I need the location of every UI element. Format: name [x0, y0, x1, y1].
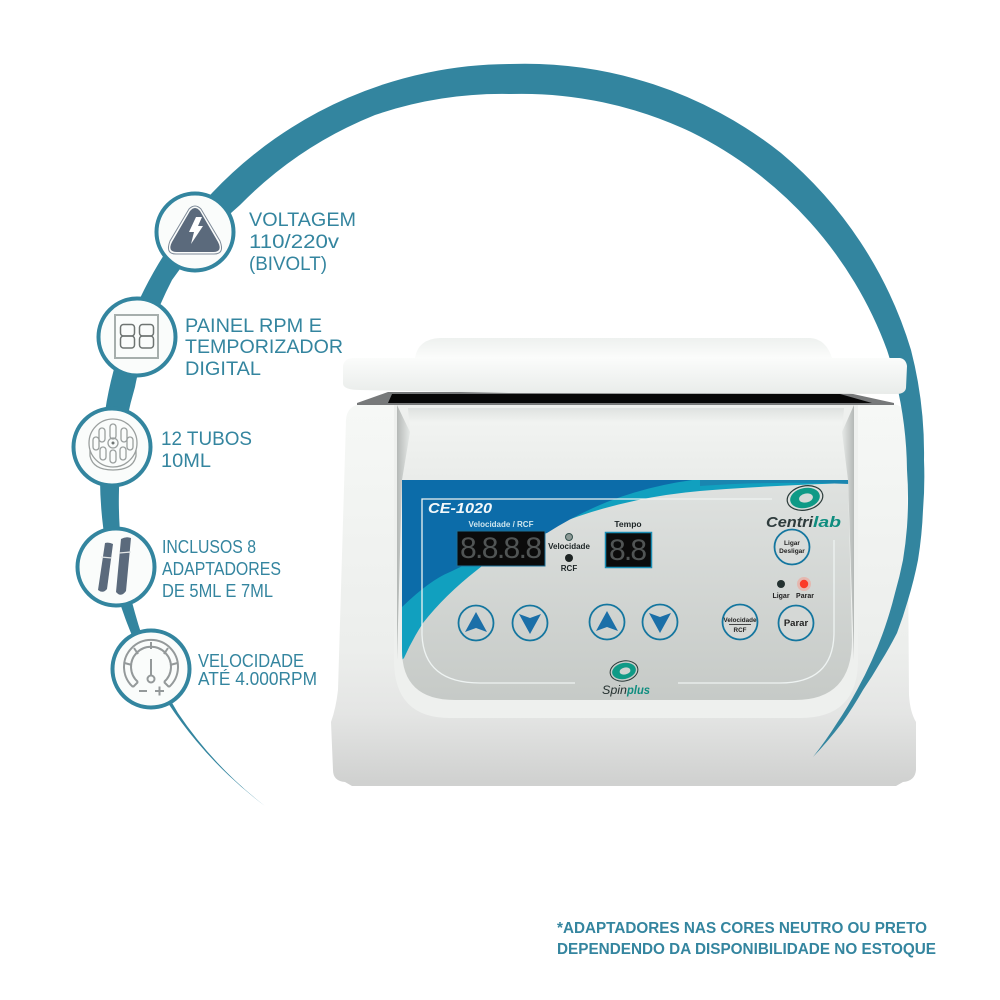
speed rcf button: RCF [734, 627, 747, 634]
speed rcf button: Velocidade [724, 617, 757, 624]
centrilab logo: Centri [766, 514, 814, 531]
speed display [457, 520, 545, 566]
side knob [907, 428, 909, 442]
teal arc [100, 64, 924, 806]
text: adapters: ADAPTADORES [162, 559, 281, 579]
text: tubes: 10ML [161, 451, 211, 472]
icon badge: rotor [74, 408, 150, 486]
centrilab logo [766, 483, 841, 531]
power button: Ligar [784, 540, 800, 547]
feature: voltage [156, 194, 356, 275]
icon badge: gauge [112, 630, 190, 708]
footnote [557, 920, 936, 958]
feature: speed [112, 630, 317, 708]
time display: 8.8 [609, 534, 647, 567]
blue swoosh graphic [402, 479, 850, 660]
time display [606, 519, 652, 568]
centrifuge body [331, 404, 916, 786]
status lights: Parar [796, 593, 814, 600]
spinplus logo: Spin [602, 683, 627, 697]
text: adapters: DE 5ML E 7ML [162, 581, 273, 601]
text: voltage: 110/220v [249, 231, 339, 253]
icon badge: adapters [78, 528, 154, 606]
footnote: *ADAPTADORES NAS CORES NEUTRO OU PRETO [557, 920, 927, 937]
icon badge: voltage [156, 194, 234, 270]
text: digital panel [185, 315, 343, 380]
speed display: Velocidade / RCF [469, 520, 534, 529]
text: speed: VELOCIDADE [198, 651, 304, 671]
centrifuge lid [343, 338, 907, 405]
text: voltage [249, 209, 356, 275]
control panel [402, 479, 852, 700]
status lights: Ligar [772, 593, 790, 600]
time display: Tempo [614, 519, 642, 529]
power button: Desligar [779, 548, 805, 555]
speed display: 8.8.8.8 [460, 532, 542, 565]
feature: tubes [74, 408, 252, 486]
text: adapters [162, 537, 281, 601]
spinplus logo: plus [626, 683, 650, 697]
arrow buttons [458, 604, 678, 640]
text: digital panel: DIGITAL [185, 358, 261, 380]
indicator lights velocidade and rcf: RCF [561, 564, 577, 573]
text: tubes [161, 429, 252, 472]
status lights [772, 577, 814, 600]
indicator lights velocidade and rcf: Velocidade [548, 542, 590, 551]
indicator lights velocidade and rcf [548, 534, 590, 573]
spinplus logo [602, 658, 650, 697]
model label: CE-1020 [428, 500, 493, 517]
text: voltage: (BIVOLT) [249, 253, 327, 275]
power button [774, 530, 810, 564]
stop button: Parar [784, 618, 808, 629]
speed rcf button [722, 604, 758, 640]
text: adapters: INCLUSOS 8 [162, 537, 256, 557]
text: speed: ATÉ 4.000RPM [198, 669, 317, 689]
stop button [778, 606, 814, 640]
text: speed [198, 651, 317, 689]
feature: adapters [78, 528, 281, 606]
text: digital panel: PAINEL RPM E [185, 315, 322, 337]
text: digital panel: TEMPORIZADOR [185, 336, 343, 358]
centrilab logo: lab [813, 514, 841, 531]
text: voltage: VOLTAGEM [249, 209, 356, 231]
feature: digital panel [98, 298, 343, 380]
footnote: DEPENDENDO DA DISPONIBILIDADE NO ESTOQUE [557, 941, 936, 958]
text: tubes: 12 TUBOS [161, 429, 252, 450]
icon badge: digital display [98, 298, 176, 376]
